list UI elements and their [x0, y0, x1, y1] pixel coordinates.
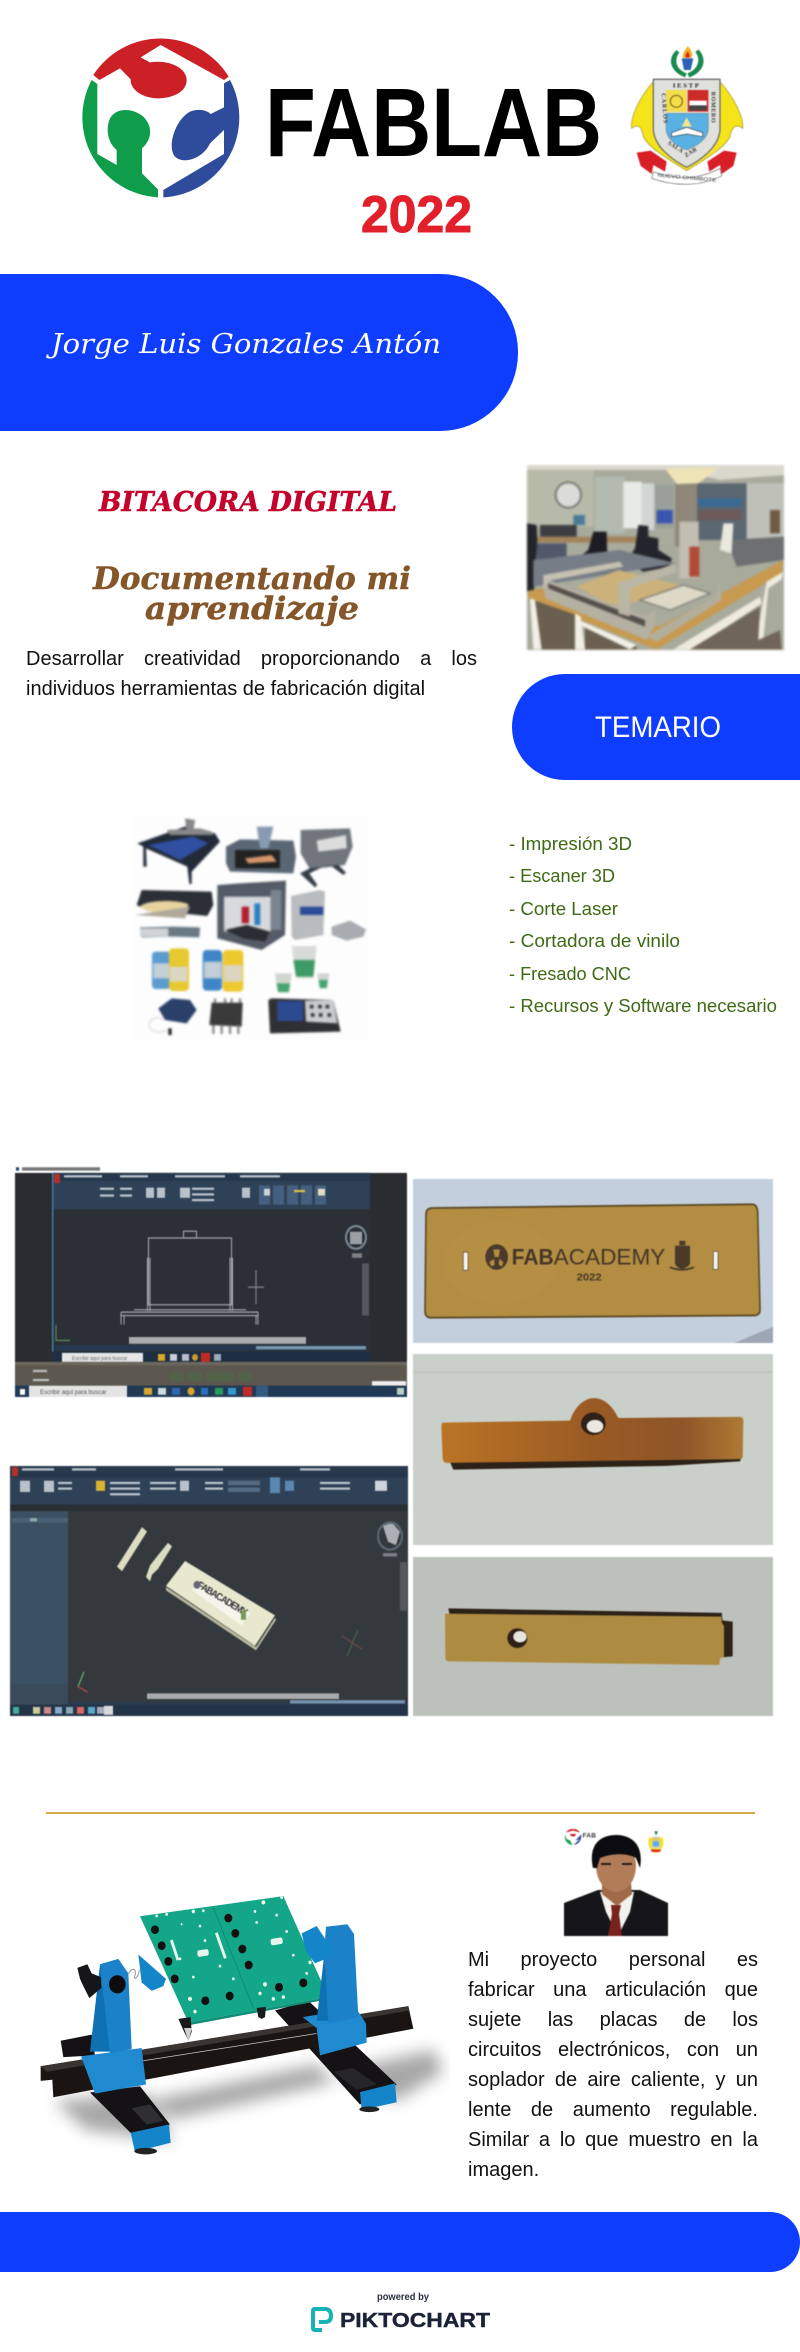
icon: institute crest: ZAR: [684, 147, 699, 159]
icon: institute crest: [630, 46, 744, 186]
screenshot: CAD 3D model of the nameplate: [9, 1465, 409, 1717]
heading: Bitacora digital: BITACORA DIGITAL: [98, 487, 397, 518]
footer: powered by Piktochart: PIKTOCHART: [340, 2310, 490, 2332]
heading: Documentando mi aprendizaje: aprendizaje: [145, 591, 359, 627]
list: temario topics: - Impresión 3D: [509, 834, 632, 854]
icon: small institute crest: [648, 1830, 664, 1854]
icon: Fab Lab logo: [82, 38, 240, 198]
illustration: PCB holder with circuit board: [40, 1896, 450, 2154]
screenshot: CAD front view: Escribir aquí para buscar: [40, 1389, 107, 1396]
photo: author portrait: [563, 1834, 669, 1937]
text block: proyecto personal: imagen.: [468, 2159, 539, 2181]
image: digital fabrication machines: [135, 817, 367, 1037]
photo: laser cut piece with tab: [412, 1556, 774, 1716]
icon: small Fab Academy logo: FAB: [582, 1832, 596, 1840]
heading: Documentando mi aprendizaje: [92, 561, 411, 627]
panel: temario banner: [512, 674, 800, 780]
text block: proyecto personal: lente de aumento regulable.: [468, 2099, 758, 2121]
photo: fab lab workshop: [525, 464, 786, 652]
icon: small Fab Academy logo: [564, 1828, 596, 1846]
icon: institute crest: ROMERO: [709, 92, 715, 123]
list: temario topics: - Cortadora de vinilo: [509, 931, 680, 951]
photo: laser cut nameplate: [412, 1178, 774, 1344]
photo: laser cut piece with hole: [412, 1354, 774, 1546]
temario label: TEMARIO: [595, 711, 721, 744]
text block: proyecto personal: fabricar una articulación que: [468, 1979, 758, 2001]
icon: institute crest: NUEVO CHIMBOTE: [657, 173, 718, 184]
text block: proyecto personal: circuitos electrónicos, con un: [468, 2039, 758, 2061]
text block: proyecto personal: soplador de aire caliente, y un: [468, 2069, 758, 2091]
icon: institute crest: IESTP: [673, 82, 700, 89]
panel: footer bar: [0, 2212, 800, 2272]
list: temario topics: [509, 834, 777, 1016]
divider line: [46, 1812, 755, 1814]
panel: author name banner: [0, 274, 518, 431]
footer: powered by Piktochart: [311, 2292, 490, 2332]
heading: Documentando mi aprendizaje: Documentando mi: [92, 561, 411, 597]
icon: institute crest: SALA: [666, 141, 684, 155]
text block: proyecto personal: Similar a lo que muestro en la: [468, 2129, 758, 2151]
text block: objetivo: individuos herramientas de fabricación digital: [26, 678, 425, 700]
list: temario topics: - Fresado CNC: [509, 964, 631, 984]
list: temario topics: - Corte Laser: [509, 899, 618, 919]
list: temario topics: - Recursos y Software necesario: [509, 996, 777, 1016]
screenshot: CAD front view: Escribir aquí para buscar: [72, 1356, 128, 1362]
author name: Jorge Luis Gonzales Antón: [46, 329, 441, 360]
photo: laser cut nameplate: FAB: [512, 1246, 554, 1270]
text block: proyecto personal: sujete las placas de los: [468, 2009, 758, 2031]
text block: objetivo: [26, 648, 477, 700]
photo: laser cut nameplate: ACADEMY: [554, 1246, 666, 1270]
photo: laser cut nameplate: 2022: [577, 1272, 602, 1284]
icon: institute crest: CARLOS: [660, 93, 668, 124]
text block: proyecto personal: Mi proyecto personal es: [468, 1949, 758, 1971]
screenshot: CAD front view: [14, 1166, 408, 1398]
list: temario topics: - Escaner 3D: [509, 866, 615, 886]
text block: proyecto personal: [468, 1949, 758, 2181]
screenshot: CAD 3D model of the nameplate: FABACADEMY: [196, 1580, 250, 1619]
text block: objetivo: Desarrollar creatividad proporcionando a los: [26, 648, 477, 670]
footer: powered by Piktochart: powered by: [377, 2292, 429, 2303]
